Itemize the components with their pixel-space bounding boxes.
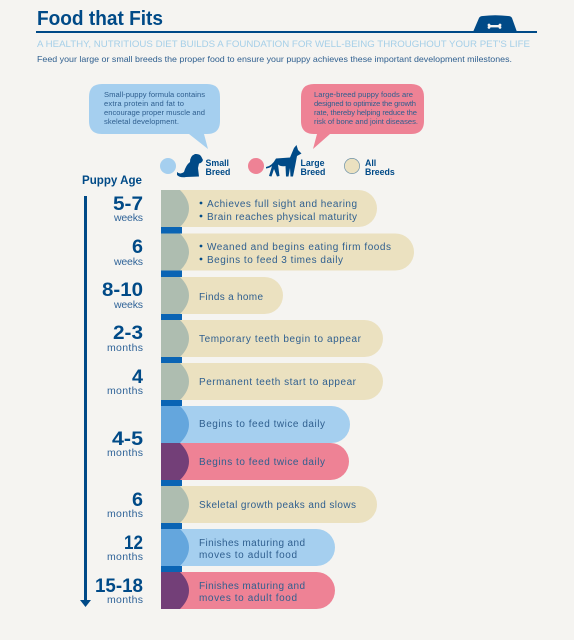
row: 15-18 months: 15-18 <box>95 576 143 597</box>
row: 12 months: 12 <box>124 533 143 554</box>
row: 6 weeks <box>113 234 414 270</box>
callout: large breed <box>301 84 424 149</box>
row: 5-7 weeks: Brain reaches physical maturity <box>207 212 357 223</box>
row: 5-7 weeks: weeks <box>113 212 143 224</box>
row: 4 months <box>107 363 383 400</box>
row: 15-18 months <box>95 572 335 609</box>
row: 2-3 months: 2-3 <box>113 323 143 344</box>
row: 5-7 weeks: Achieves full sight and hearing <box>207 199 357 210</box>
row: 4 months: Permanent teeth start to appear <box>199 377 357 388</box>
row: 6 weeks: Weaned and begins eating firm foods <box>207 242 391 253</box>
callout: large breed: designed to optimize the growth <box>314 99 416 108</box>
header rule <box>36 31 537 33</box>
title: Food that Fits <box>37 7 163 30</box>
row: 12 months <box>107 529 335 566</box>
row: 2-3 months: Temporary teeth begin to appear <box>199 334 362 345</box>
legend: small breed: Breed <box>206 167 230 177</box>
legend: small breed: Small <box>206 158 229 168</box>
legend: all breeds: All <box>365 158 376 168</box>
callout: small breed: encourage proper muscle and <box>104 108 205 117</box>
row: 8-10 weeks: Finds a home <box>199 292 263 303</box>
legend: large breed: Large <box>300 158 325 168</box>
callout: small breed: extra protein and fat to <box>104 99 184 108</box>
row: 15-18 months: months <box>107 594 143 606</box>
intro text: Feed your large or small breeds the proper food to ensure your puppy achieves these important development milestones. <box>37 55 512 64</box>
row: 15-18 months: Finishes maturing and <box>199 581 305 592</box>
timeline connector strips <box>161 227 182 572</box>
row: 4-5 months small breed: Begins to feed twice daily <box>199 419 325 430</box>
callout: small breed: skeletal development. <box>104 117 179 126</box>
row: 8-10 weeks: weeks <box>113 299 143 311</box>
row: 6 months: 6 <box>132 490 143 511</box>
callout: large breed: rate, thereby helping reduce the <box>314 108 417 117</box>
age label: 4-5 months: 4-5 <box>112 429 143 450</box>
legend: large breed <box>248 145 325 177</box>
row: 4-5 months large breed <box>161 443 349 480</box>
row: 8-10 weeks: 8-10 <box>102 280 143 301</box>
row: 5-7 weeks <box>113 190 377 227</box>
row: 4 months: months <box>107 385 143 397</box>
row: 6 months: Skeletal growth peaks and slows <box>199 500 356 511</box>
callout: small breed <box>89 84 220 149</box>
age label: 4-5 months: months <box>107 447 143 459</box>
legend: all breeds <box>344 158 395 177</box>
legend: large breed: Breed <box>300 167 325 177</box>
callout: large breed: risk of bone and joint diseases. <box>314 117 418 126</box>
row: 12 months: months <box>107 551 143 563</box>
legend: small breed <box>160 154 230 177</box>
heading: puppy age: Puppy Age <box>82 175 142 187</box>
subtitle: A HEALTHY, NUTRITIOUS DIET BUILDS A FOUNDATION FOR WELL-BEING THROUGHOUT YOUR PET'S LIFE <box>37 39 530 50</box>
timeline arrow <box>80 196 91 607</box>
row: 4-5 months large breed: Begins to feed twice daily <box>199 457 325 468</box>
row: 6 weeks: 6 <box>132 237 143 258</box>
age label: 4-5 months <box>107 429 143 459</box>
row: 2-3 months: months <box>107 342 143 354</box>
row: 4 months: 4 <box>132 367 143 388</box>
icon: dog bowl <box>473 15 517 32</box>
row: 12 months: Finishes maturing and <box>199 538 305 549</box>
legend: all breeds: Breeds <box>365 167 395 177</box>
callout: small breed: Small-puppy formula contains <box>104 90 205 99</box>
row: 15-18 months: moves to adult food <box>199 593 297 604</box>
row: 6 months: months <box>107 508 143 520</box>
row: 6 weeks: weeks <box>113 256 143 268</box>
row: 2-3 months <box>107 320 383 357</box>
callout: large breed: Large-breed puppy foods are <box>314 90 413 99</box>
row: 6 weeks: Begins to feed 3 times daily <box>207 255 343 266</box>
row: 8-10 weeks <box>102 277 283 314</box>
row: 4-5 months small breed <box>161 406 350 443</box>
row: 12 months: moves to adult food <box>199 550 297 561</box>
row: 6 months <box>107 486 377 523</box>
row: 5-7 weeks: 5-7 <box>113 194 143 215</box>
